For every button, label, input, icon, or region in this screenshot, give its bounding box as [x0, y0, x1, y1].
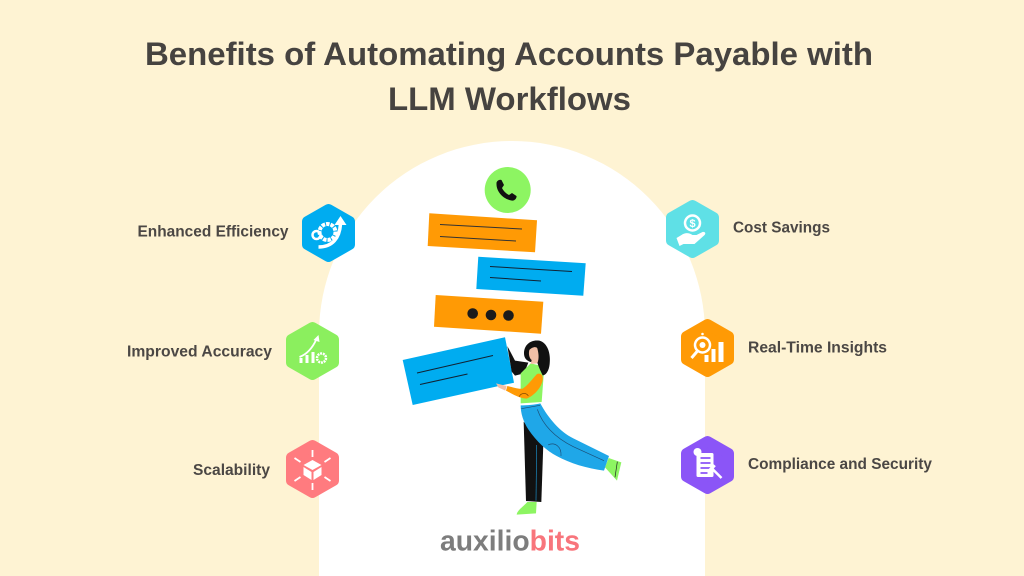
hand [496, 383, 507, 391]
standing shoe [517, 502, 537, 515]
benefit: Compliance and Security: Compliance and Security [748, 456, 932, 473]
icon: checklist with gavel [686, 442, 728, 488]
benefit: Enhanced Efficiency: Enhanced Efficiency [138, 224, 289, 240]
icon: chart with gear [292, 328, 334, 374]
black standing leg [524, 422, 543, 502]
face [529, 347, 539, 364]
icon: hand holding coin: $ [689, 218, 696, 230]
icon: cube with arrows [292, 446, 334, 492]
blue trousers [521, 403, 609, 471]
illustration: woman holding a message bubble [403, 337, 621, 515]
logo: auxiliobits [440, 526, 580, 558]
benefit: Scalability [193, 446, 334, 492]
benefit: Scalability: Scalability [193, 462, 270, 479]
benefit: Enhanced Efficiency [138, 210, 350, 256]
black back arm [507, 346, 528, 376]
illustration: orange typing bubble [434, 295, 543, 334]
green top [521, 363, 544, 403]
title: Benefits of Automating Accounts Payable with [145, 36, 873, 72]
hair [524, 340, 550, 375]
icon: hand holding coin [672, 206, 714, 252]
illustration: phone icon [485, 167, 531, 213]
benefit: Real-Time Insights: Real-Time Insights [748, 340, 887, 356]
icon: gear with arrow [308, 210, 350, 256]
benefit: Real-Time Insights [686, 324, 887, 372]
title [145, 36, 873, 117]
benefit: Cost Savings: Cost Savings [733, 220, 830, 236]
icon: magnifier with bulb and bars [686, 324, 728, 372]
title: LLM Workflows [388, 81, 631, 117]
illustration: orange message bubble [428, 213, 537, 252]
benefit: Improved Accuracy [127, 328, 334, 374]
benefit: Cost Savings [672, 206, 830, 252]
illustration: blue message bubble [476, 257, 586, 296]
large blue bubble [403, 337, 514, 405]
white arch panel [319, 141, 705, 576]
orange sleeve [506, 374, 543, 399]
benefit: Compliance and Security [686, 442, 932, 488]
benefit: Improved Accuracy: Improved Accuracy [127, 344, 272, 360]
raised shoe [605, 458, 621, 481]
